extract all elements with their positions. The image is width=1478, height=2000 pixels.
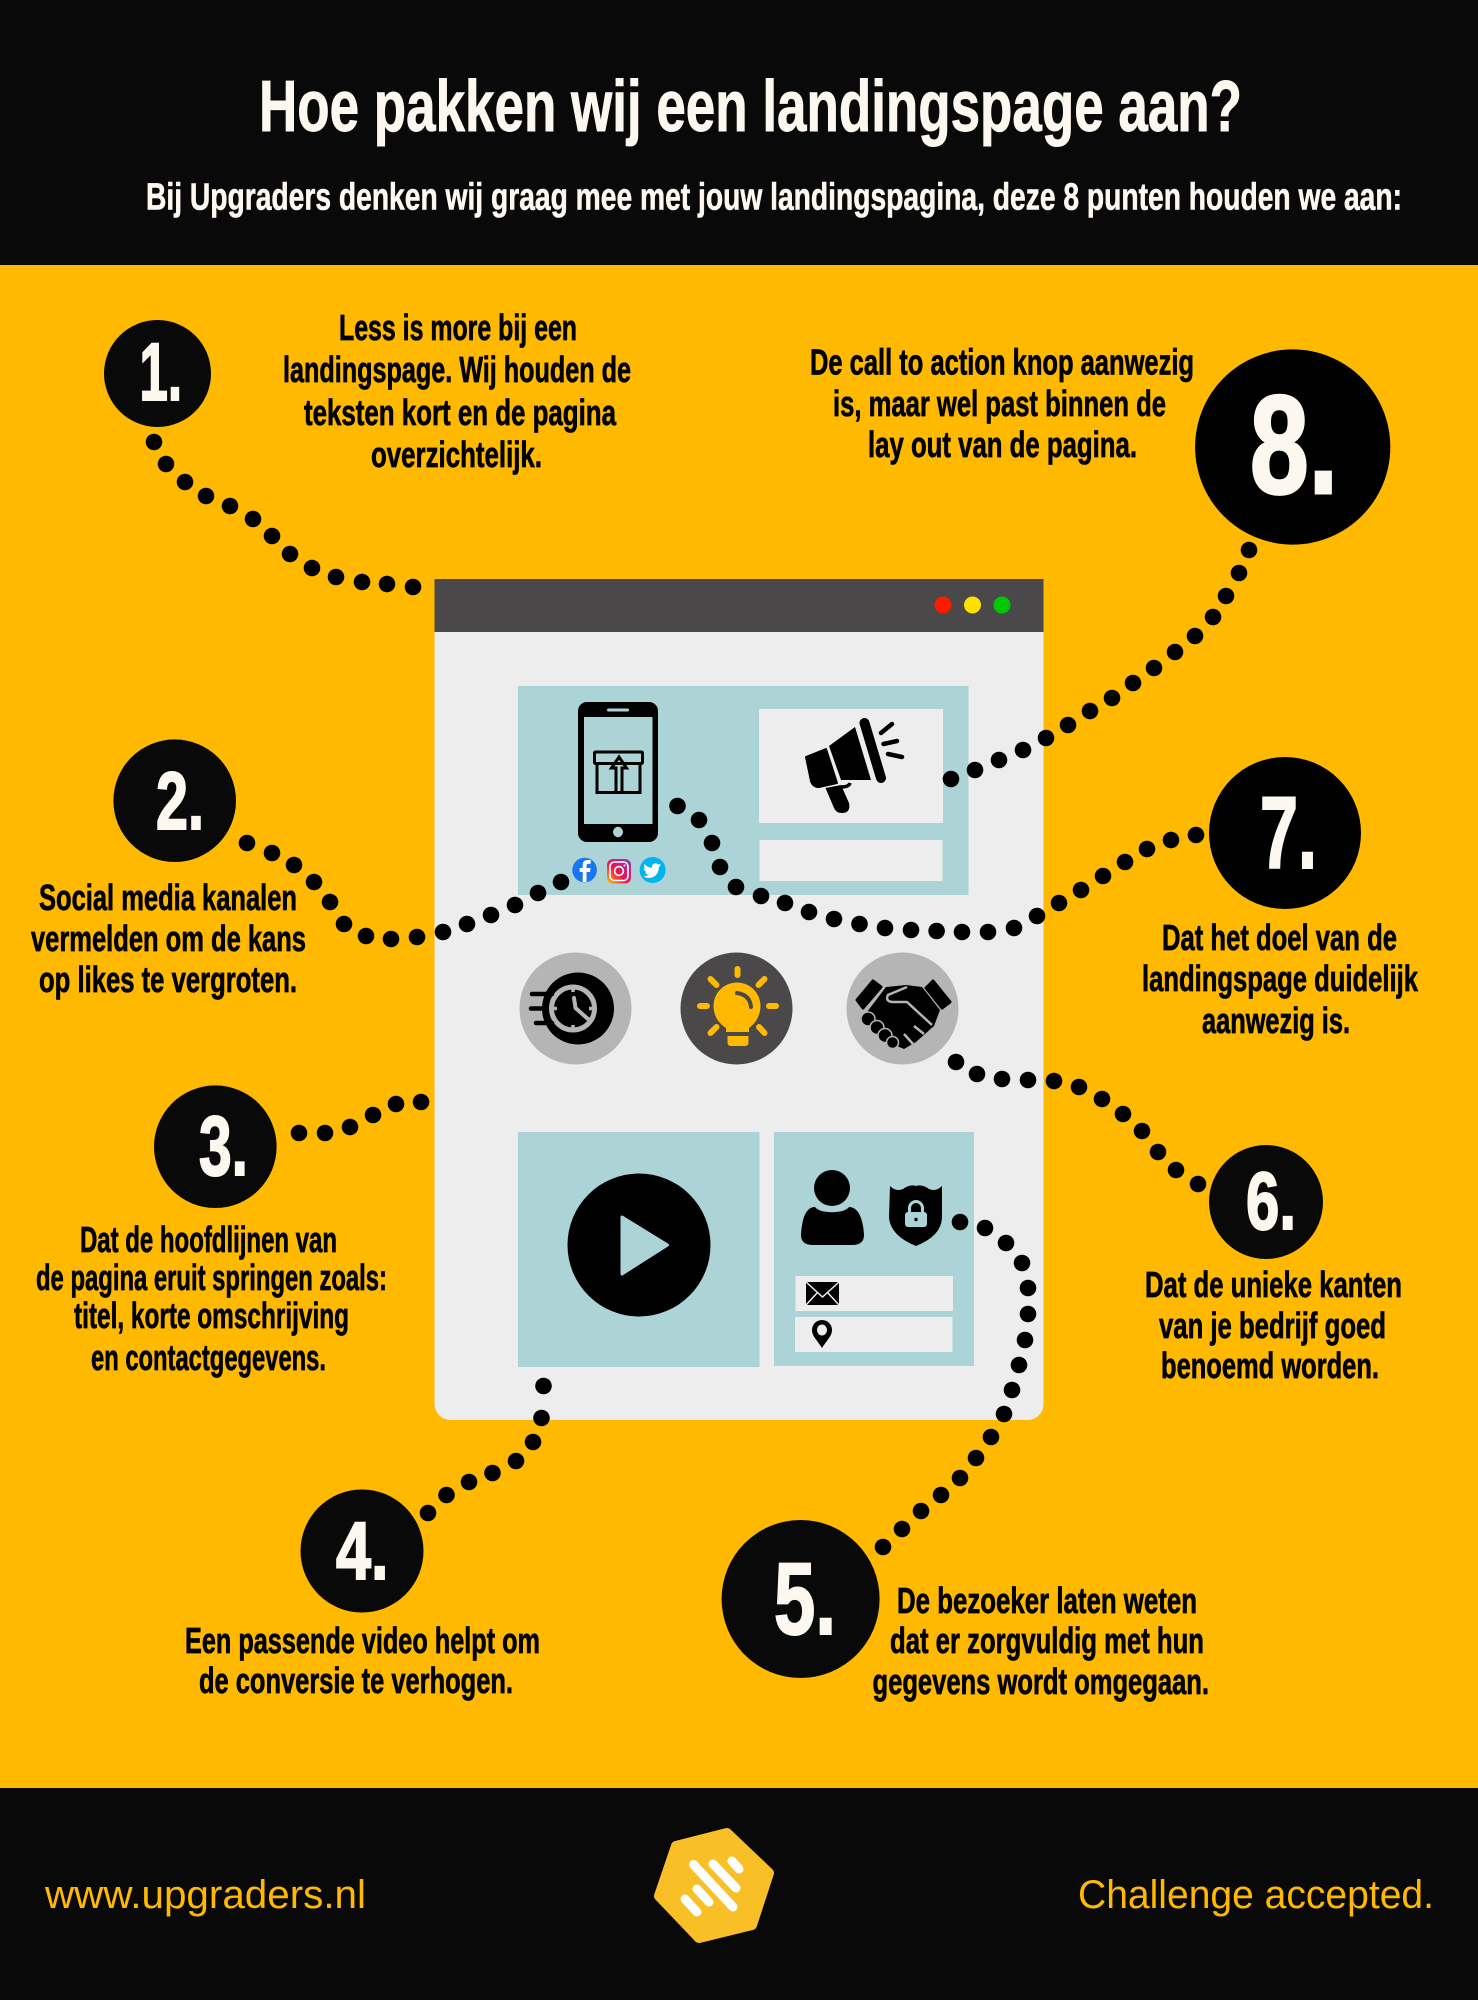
icon: light bulb [680,952,792,1064]
icon: shield with lock [889,1185,942,1246]
text block 3: en contactgegevens. [91,1337,326,1378]
background: yellow panel [0,265,1478,1788]
text block 1: teksten kort en de pagina [304,392,617,433]
window body [434,632,1044,1420]
text block 4 [185,1620,540,1701]
email field [796,1276,953,1311]
number badge 2 [113,739,236,862]
hero white bar [760,840,942,881]
text block 1: landingspage. Wij houden de [283,349,631,390]
number badge 4 [300,1490,424,1612]
number badge 3: 3. [199,1099,248,1193]
footer band [0,1788,1478,2000]
icon: play button [568,1174,710,1316]
number badge 7: 7. [1260,776,1317,890]
number badge 8 [1195,349,1390,545]
dotted connector 2 [239,835,569,947]
text block 1 [283,307,631,475]
text block 7 [1142,917,1419,1041]
number badge 3 [154,1085,277,1208]
icon: instagram [607,859,631,884]
number badge 6: 6. [1246,1156,1296,1247]
icon: smartphone with package [578,702,658,842]
text block 5: gegevens wordt omgegaan. [872,1661,1209,1702]
dotted connector 4 [420,1378,552,1521]
dotted connector 1 [146,434,421,595]
icon: person [801,1170,864,1245]
number badge 6 [1209,1145,1323,1259]
number badge 8: 8. [1250,366,1338,523]
dotted connector 5 [875,1214,1036,1555]
number badge 4: 4. [336,1506,388,1597]
text block 4: Een passende video helpt om [185,1620,540,1661]
hero panel [518,686,968,895]
number badge 7 [1209,757,1361,909]
text block 2 [31,877,306,1000]
number badge 5 [722,1520,880,1678]
icon: handshake [846,952,958,1064]
header band [0,0,1478,265]
browser window mockup [434,579,1044,1420]
dotted connector 8 [943,542,1257,787]
text block 6: van je bedrijf goed [1159,1305,1386,1346]
text block 2: vermelden om de kans [31,918,306,959]
text block 8: is, maar wel past binnen de [833,383,1166,424]
number badge 2: 2. [156,756,204,847]
icon: twitter [640,857,666,883]
video panel [518,1132,760,1367]
text block 5: dat er zorgvuldig met hun [890,1620,1204,1661]
location field [795,1317,952,1352]
text block 5: De bezoeker laten weten [897,1580,1197,1621]
text block 8: De call to action knop aanwezig [810,342,1194,382]
text block 3: Dat de hoofdlijnen van [80,1219,337,1260]
text block 1: Less is more bij een [339,307,577,348]
text block 8: lay out van de pagina. [868,424,1137,465]
dotted connector 7 [669,798,1204,940]
window title bar [434,579,1044,632]
text block 4: de conversie te verhogen. [199,1660,513,1701]
number badge 1: 1. [140,327,182,418]
footer url: www.upgraders.nl [44,1873,366,1917]
text block 2: op likes te vergroten. [39,959,297,1000]
hero white block with megaphone [759,709,943,823]
text block 7: aanwezig is. [1202,1000,1350,1041]
icon: fast clock [520,952,632,1064]
text block 5 [872,1580,1209,1702]
text block 3: de pagina eruit springen zoals: [36,1257,387,1298]
dotted connector 6 [948,1054,1206,1192]
footer slogan: Challenge accepted. [1078,1873,1434,1917]
text block 2: Social media kanalen [39,877,297,918]
dotted connector 3 [291,1094,429,1141]
text block 3 [36,1219,387,1378]
icon: facebook [572,858,597,882]
text block 1: overzichtelijk. [371,434,542,475]
number badge 5: 5. [774,1542,836,1656]
text block 6 [1145,1264,1402,1386]
contact panel [774,1132,974,1366]
number badge 1 [104,320,211,427]
text block 8 [810,342,1194,465]
icon: upgraders logo [659,1833,769,1938]
text block 6: benoemd worden. [1161,1345,1379,1386]
text block 3: titel, korte omschrijving [74,1295,349,1336]
